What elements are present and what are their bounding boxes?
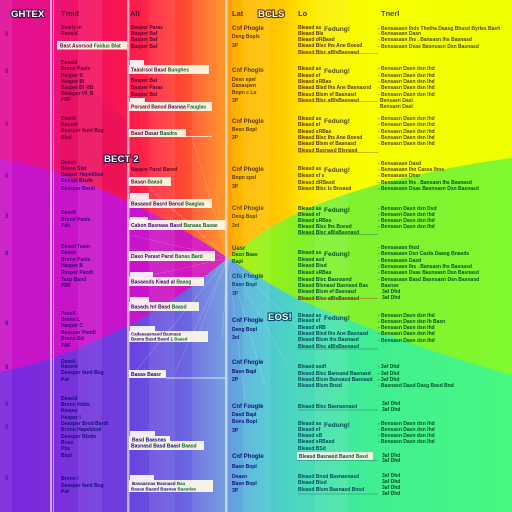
text column: Lo: Bleasd Blsm Bansasd Basnasd [298,377,372,383]
text column: Lo: Bleasd Blsc aBlsBasnasd [298,98,359,104]
text column: Lo: Bleasd Blsc aBlsBasnasd [298,344,359,350]
text column: Lat: Cfo Fhogle [232,274,264,280]
text column: Lo: Bleasd Blsc Bansasd Basnasd [298,371,371,377]
row index numbers: 0 [5,32,9,38]
text column: Lo: Bleasd sRBas [298,218,332,224]
text column: Tmid: Deasli [61,359,76,365]
text column: Tnerl: - Bensasn Dasn dsn Ihd [378,224,435,230]
text column: Lo: Bleasd Bls [298,31,324,37]
callouts: Alt highlighted rows: Basd Baasnas [132,438,166,444]
text column: bold Lo sub-labels: Fedung! [324,167,350,174]
text column: Lat: Deasn [232,474,247,480]
text column: Lat: Deng Bopl [232,214,258,220]
text column: Lo: Bleasd Blsc Basnasnd [298,277,352,283]
text column: Tmid: Blad [61,135,72,141]
text column: Lo: Bleasd sRBas [298,129,332,135]
text column: Tnerl: - Bensasn Dasn dsn Ihd [378,141,435,147]
callouts: Alt highlighted rows: Basas Baasd Basnas Baasdas [131,486,197,492]
text column: Tmid: Raoeid [61,122,78,128]
callouts: Alt highlighted rows: Basan Baasd [131,180,162,186]
text column: Lat: Cnf Phogle [232,206,264,212]
text column: bold Lo sub-labels: Fedung! [324,422,350,429]
column headings [61,9,399,18]
column headings: Tnerl [381,9,399,18]
text column: Lo: Bleasd Blsm Basnasd Bnsd [298,487,364,493]
text column: Tnerl: - Bensasasn Basd Basnsasn Dsn Basnasd [378,277,479,283]
text column: Tnerl: - Bensasn Dasn dsn Ihd [378,427,435,433]
text column: Tmid: Dasper Hapeblool [61,172,104,178]
text column: Tmid: Rasper Pandl [61,270,94,276]
row index numbers: 0 [5,476,9,482]
text column: Tnerl: - Basnasd Dasd Dasg Basd Bnd [378,383,454,389]
text column: Tnerl: - Bensasasn Dsas Basnsasn Dsn Basnasd [378,270,479,276]
text column: Tnerl: - Bensasasn Dasd [378,161,421,167]
text column: Tnerl: - Bensasasn Dasn [378,31,421,37]
text column: Tmid: Beasper Pandl [61,330,96,336]
text column: Tmid: Denspl Blsdo [61,178,93,184]
text column: Tnerl: - 3af Dhd [378,377,399,383]
text column: Alt: Basper Parsl Bared [131,167,177,173]
text column: Tnerl: - Bensasn Dasn dsn Ihd [378,338,435,344]
text column: Lo: Bleasd Blsc aBlsBasnasd [298,230,359,236]
text column: Lo: Bleasd sRBas [298,79,332,85]
text column: Lo: Bleasd as [298,66,322,72]
text column: Tmid: Searly m [61,25,82,31]
text column: Tnerl: - Bensasasn Dasd [378,258,421,264]
text column: Lat: 3nl [232,335,240,341]
text column: Tmid: Deasli [61,160,76,166]
text column: Lo: Bleasd Bnsd Basnasnasd [298,474,359,480]
row index numbers: 0 [5,402,9,408]
text column: Lo: Bleasd Blsc Ihs Ane Boesd [298,43,362,49]
text column: Lat: Danaspen [232,83,256,89]
text column: Lat: Desn spel [232,77,256,83]
text column: Tmid: Bosn [61,440,74,446]
text column: Tnerl: 3af Dhd [382,407,400,413]
text column: Tnerl: Bensasn Dasl [380,98,413,104]
text column: Tnerl: 3af Dhd [382,295,400,301]
text column: Tnerl: - Bensasasn Dsas Basnsasn Dsn Basnasd [378,44,479,50]
text column: Tmid: Hasper B [61,263,83,269]
text column: Tmid: Deasll [61,210,76,216]
text column: Lo: Bleasd Blsd Ihs Ane Basnasd [298,331,368,337]
text column: Lo: Bleasd as [298,313,322,319]
text column: Tmid: Bronn Bd [61,336,84,342]
title: centre badge: BECT 2 [104,154,139,165]
text column: Tnerl: - Bensasasn Ihn Casss Ihns [378,167,444,173]
text column: Tmid: Heaper l [61,415,81,421]
text column: Lo: Bleasd Basnasd Blsnasd [298,148,357,154]
text column: Tmid: Bronn l [61,476,79,482]
text column: Lo: Bleasd as [298,166,322,172]
text column: Tnerl: 3af Dhd [382,473,400,479]
callouts: Alt highlighted rows: Basaasnas Basnasd Baa [132,481,186,486]
text column: Tmid: PBF [61,97,71,103]
text column: Lat: Basn Bopl [232,464,257,470]
text column: Tnerl: - Bensasn Dasn dsn Ihd [378,313,435,319]
text column: Lo: Bleasd sRBasd [298,439,334,445]
text column: Tmid: Daasli [61,116,76,122]
text column: Lo: Bleasd ef [298,212,321,218]
text column: Lo: Bleasd BSd [298,446,326,452]
text column: Lat: Cnf Fhogle [232,318,264,324]
text column: Lo: Bleasd ef [298,427,321,433]
text column: Tnerl: 3af Dhd [382,491,400,497]
text column: Tnerl: - Bensasn Dasn dsn Ihd [378,122,435,128]
text column: Tnerl: 3af Dhd [382,485,400,491]
callouts: Alt highlighted rows: Daso Parast Parsl Banas Bard [131,254,203,260]
text column: Lat: 3P [232,43,239,49]
text column: Lo: Bleasd sRB [298,325,326,331]
text column: Tmid: Pbs [61,446,70,452]
text column: Tmid: PBF [61,343,71,349]
row index numbers: 3 [5,214,9,220]
callout: Lo highlighted row: Bleasd Basnasd Basnd Basd [299,454,368,460]
text column: Lat: 2P [232,377,239,383]
text column: Lat: Uasr [232,246,246,252]
row index numbers: 8 [5,69,9,75]
text column: Alt: Basper Paras [131,25,163,31]
text column: Lo: Bleasd Blsm ef Basnasd [298,289,356,295]
text column: Lat: 3P [232,98,239,104]
text column: Tmid: Hasper B [61,73,83,79]
text column: Tmid: Sasper Bl -8B [61,85,94,91]
text column: Lo: Bleasd Bisd [298,263,327,269]
text column: Lo: Bleasd Blsm ef Basnasd [298,92,356,98]
text column: Lat: Cnf Phogle [232,454,264,460]
text column: Tnerl: - Bensasn Dasn dsn Ihd [378,92,435,98]
text column: Lat: Bons Bopl [232,419,258,425]
text column: bold Lo sub-labels: Fedung! [324,207,350,214]
text column: Lat: Basn Bapl [232,369,257,375]
text column: Tmid: Bronn Paols [61,257,91,263]
text column: Lo: Bleasd Blsd [298,480,327,486]
text column: Lat: Cnf Fougle [232,404,264,410]
column headings: Lo [298,9,308,18]
text column: Tnerl: - Bensasn Dasn dsn Ihd [378,73,435,79]
callouts: Alt highlighted rows: Cabon Basnaas Basd Banaas Baoae [131,223,218,229]
callouts: Alt highlighted rows: Basas Baasr [131,372,161,378]
text column: Tnerl: - Bensasn Dasn dsn Ihd [378,85,435,91]
text column: Lo: Bleasd asdf [298,364,326,370]
text column: Lat: Deng Bopls [232,34,260,40]
text column: Tnerl: - Bensasn Dasn dsn Ihd [378,439,435,445]
text column: Tmid: Deasper fand Bug [61,128,104,134]
text column: Lo: Bleasd as [298,25,322,31]
text column: Lat: Bapl [232,259,243,265]
callouts: Alt highlighted rows: Taaslrsol Basd Bunghes [131,68,189,74]
row index numbers: 0 [5,425,9,431]
title: lower right badge: EOS! [268,312,292,323]
text column: Lat: Bopn c Lo [232,90,256,96]
text column: Lo: Bleasd ef [298,73,321,79]
text column: Lat: 3P [232,488,239,494]
text column: Lo: Bleasd Blsc Is Bnsasd [298,186,351,192]
text column: Lat: Basn Bopl [232,282,257,288]
callouts: Alt highlighted rows: Porsard Bansd Basnaa Fauglas [131,104,206,110]
callout: Lo highlighted row [297,452,373,460]
text column: Tmid: Deasper fand Bug [61,370,104,376]
text column: Tnerl: - Bensasasn Ihds Thstha Daasg Bhasd Byrles Bash [378,26,500,32]
text column: Lo: Bleasd sB [298,433,323,439]
text column: Tnerl: - Bensasn Dasn dsn Ihd [378,135,435,141]
text column: Lo: Bleasd Blsc Ihs Ane Boesd [298,135,362,141]
text column: Tnerl: - 3af Dhd [378,364,399,370]
callouts: Alt highlighted rows: Cadasaasnasd Basnaas [131,332,182,336]
text column: Lo: Bleasd Blsnasd Basnasd Bas [298,283,368,289]
text column: Lat: 3P [232,428,239,434]
text column: Tmid: Bronn Hdds [61,402,90,408]
callouts: Alt highlighted rows: Basads hrl Basd Baasd [131,304,187,310]
text column: Lat: Cnf Phogle [232,119,264,125]
text column: bold Lo sub-labels: Fedung! [324,118,350,125]
text column: Tmid: Deasli Taam [61,244,90,250]
text column: Lo: Bleasd dRBasd [298,180,335,186]
callouts: Alt highlighted rows [129,60,225,492]
text column: Tnerl: - Bensasn Dasn dsn Dsd [378,206,437,212]
text column: Tmid: Bronn Hapeblool [61,427,102,433]
text column: bold Lo sub-labels: Fedung! [324,68,350,75]
column headings: Alt [130,9,140,18]
row index numbers: 9 [5,365,9,371]
text column: Tmid: Bronn L [61,317,80,323]
callouts: Alt highlighted rows: Basns Basd Basnl 1 Baasd [131,336,188,342]
text column: Tnerl: - Bensasn Dasn dsn Ihd [378,116,435,122]
text column: Lo: Bleasd dRBasd [298,37,335,43]
text column: Tmid: Bronn Paols [61,66,91,72]
text column: Lat: Dasn Baas [232,252,258,258]
text column: Lat: Bopn spsl [232,175,257,181]
row index numbers: 0 [5,174,9,180]
text column: Alt: Basper Bal [131,92,158,98]
underlines: Lo rows [297,54,378,494]
text column: Lat: 3nl [232,223,240,229]
text column: Tmid: Deasper Brod Bardl [61,421,109,427]
text column: Tnerl: - Bensasasn Dsas Basnsasn Dsn Basnasd [378,186,479,192]
text column: Lo: Bleasd Blsc aBlsBasnasd [298,296,359,302]
text column: Alt: Basper Bal [131,78,158,84]
text column: bold Lo sub-labels: Fedung! [324,251,350,258]
text column: Lo: Bleasd Blsd Ihs Ane Basnasnd [298,85,371,91]
text column: Tnerl: - Bensasn Dasn dsn Ihd [378,66,435,72]
text column: Tnerl: - Bensasn Dasn dsn Ihd [378,79,435,85]
text column: Lat: Cnf Fhoglo [232,68,264,74]
text column: Tnerl: 3af Dhd [382,401,400,407]
text column: Tnerl: - Bensasn Dasn dsn Ihd [378,129,435,135]
text column: Tmid: Deasper Barol [61,186,96,192]
text column: Tnerl: Bensasn Dasl [380,104,413,110]
text column: Tnerl: - Bensasn Dasn dsn Ihd [378,421,435,427]
text column: Tnerl: - Bensasasn Dhsr [378,173,420,179]
title: upper right badge: BCLS [258,9,285,20]
callouts: Alt highlighted rows: Basd Dasar Baadra [131,131,177,137]
text column: Lo: Bleasd ef s [298,173,325,179]
text column: Lat: Dasd Bapl [232,412,257,418]
text column: Tnerl: - Bensasasn Ihs . Bansasn Ihs Basnasd [378,37,472,43]
text column: Tmid: Deaslr [61,250,76,256]
text column: Lat: Cnf Phogle [232,26,264,32]
text column: Tnerl: - Bensasasn Dsn Casfa Daasg Bnasds [378,251,469,257]
text column: Lo: Bleasd Blsc Basnasnasd [298,404,357,410]
text column: Tnerl: - Bensasn Dasn dsn Ihd [378,212,435,218]
column headings: Tmid [61,9,79,18]
title: left column heading: GHTEX [11,9,45,20]
text column: bold Lo sub-labels: Fedung! [324,26,350,33]
text column: Tnerl: - Bensasn Dasn dsn Ihd [378,331,435,337]
text column: Tmid: Paf [61,489,69,495]
text column: Tmid: Deasper Hl_B [61,91,94,97]
text column: Tnerl: - Bensasasn Ihs . Bansasn Ihs Basnasd [378,264,472,270]
text column: Tmid: Deasper Blsdo [61,434,96,440]
text column: Lo: Bleasd Blsc Ihs Boesd [298,224,352,230]
text column: bold Lo sub-labels [324,26,350,429]
callouts: Alt highlighted rows: Basnasd Basd Baasl Baasd [131,444,197,450]
text column: Tnerl: - Bensasn Dasn dsn Ihd [378,218,435,224]
text column: Alt: Basper Baf [131,31,158,37]
text column: Lo: Bleasd as [298,250,322,256]
text column: Lo: Bleasd asd [298,257,324,263]
row index numbers: 8 [5,321,9,327]
column headings: Lat [232,9,244,18]
text column: Tmid: Raoeid [61,31,78,37]
text column: Lat: Cnf Fhogle [232,360,264,366]
text column: Tmid: Blad [61,453,72,459]
text column: Lat: Besn Bopl [232,127,257,133]
text column: Lo: Bleasd Blsc aBlsBasnasd [298,50,359,56]
row index numbers: 0 [5,122,9,128]
text column: Lat: Cnf Phogle [232,167,264,173]
text column: Tmid: Heaper Bl [61,79,85,85]
text column: Tmid: Raoeid [61,364,78,370]
text column: Lo: Bleasd ef [298,318,321,324]
text column: Alt: Basper Baf [131,37,158,43]
callout: Tmid highlight: Bast Asorsod Faidus Blat [60,44,121,50]
text column: Tnerl: - Bensasasn Ihs . Bansasn Ihs Basnasd [378,180,472,186]
text column: Tnerl: - Bensasn Dasn dsn Ih Basn [378,319,445,325]
text column: Lo: Bleasd Blsm Bnsd [298,383,342,389]
text column: Lo: Bleasd as [298,116,322,122]
text column: Tmid: Tasp Band [61,277,86,283]
text column: Lo: Bleasd Blsm Ihs Basnasd [298,337,359,343]
text column: Tmid: Peasll [61,311,76,317]
row index numbers: 8 [5,251,9,257]
text column: Tnerl: - Bensasn Dasn dsn Ihd [378,325,435,331]
text column: Lat: Basn Bopl [232,481,257,487]
text column: Tmid: Hasper C [61,323,83,329]
text column: Tmid: Deasld [61,60,77,66]
text column: Tnerl: - 3af Dhd [378,371,399,377]
text column: Tnerl: Basnse [381,283,399,289]
text column: Tmid: Pab [61,223,70,229]
text column: Lo: Bleasd ef [298,122,321,128]
text column: Lat: 3P [232,291,239,297]
text column: Tmid: Bronn Paols [61,217,91,223]
text column: Lo: Bleasd as [298,206,322,212]
text column: Alt: Basper Paras [131,85,163,91]
text column: Lo: Bleasd as [298,421,322,427]
text column: Lo: Bleasd Blsm ef Basnasd [298,141,356,147]
text column: Lo: Bleasd sRBas [298,270,332,276]
text column: Lat: 3P [232,184,239,190]
text column: Lat: Deng Bopl [232,327,258,333]
text column: Alt: Basper Baf [131,44,158,50]
text column: Tnerl: - Bensasasn Ihsd [378,245,419,251]
text column: bold Lo sub-labels: Fedung! [324,315,350,322]
text column: Tnerl: 3af Dhd [382,479,400,485]
text column: Tnerl: 3af Dhd [382,453,400,459]
text column: Tnerl: 3af Dhd [382,458,400,464]
callouts: Alt highlighted rows: Basaasds Kiasd al Baasg [131,280,191,286]
text column: Tnerl: - Bensasn Dasn dsn Ihd [378,433,435,439]
text column: Lat: 3P [232,135,239,141]
callout: Tmid highlight [57,41,127,50]
text column: Tnerl: 3af Dhd [382,289,400,295]
text column: Tmid: Paf [61,377,69,383]
text column: Tmid: PBF [61,283,71,289]
text column: Tmid: Bronn Slat [61,166,87,172]
text column: Tmid: Deasper fand Bug [61,483,104,489]
text column: Tmid: Deasld [61,396,77,402]
callouts: Alt highlighted rows: Basaasd Basrd Bansd Baaglas [131,202,205,208]
text column: Tmid: Rasper [61,408,78,414]
